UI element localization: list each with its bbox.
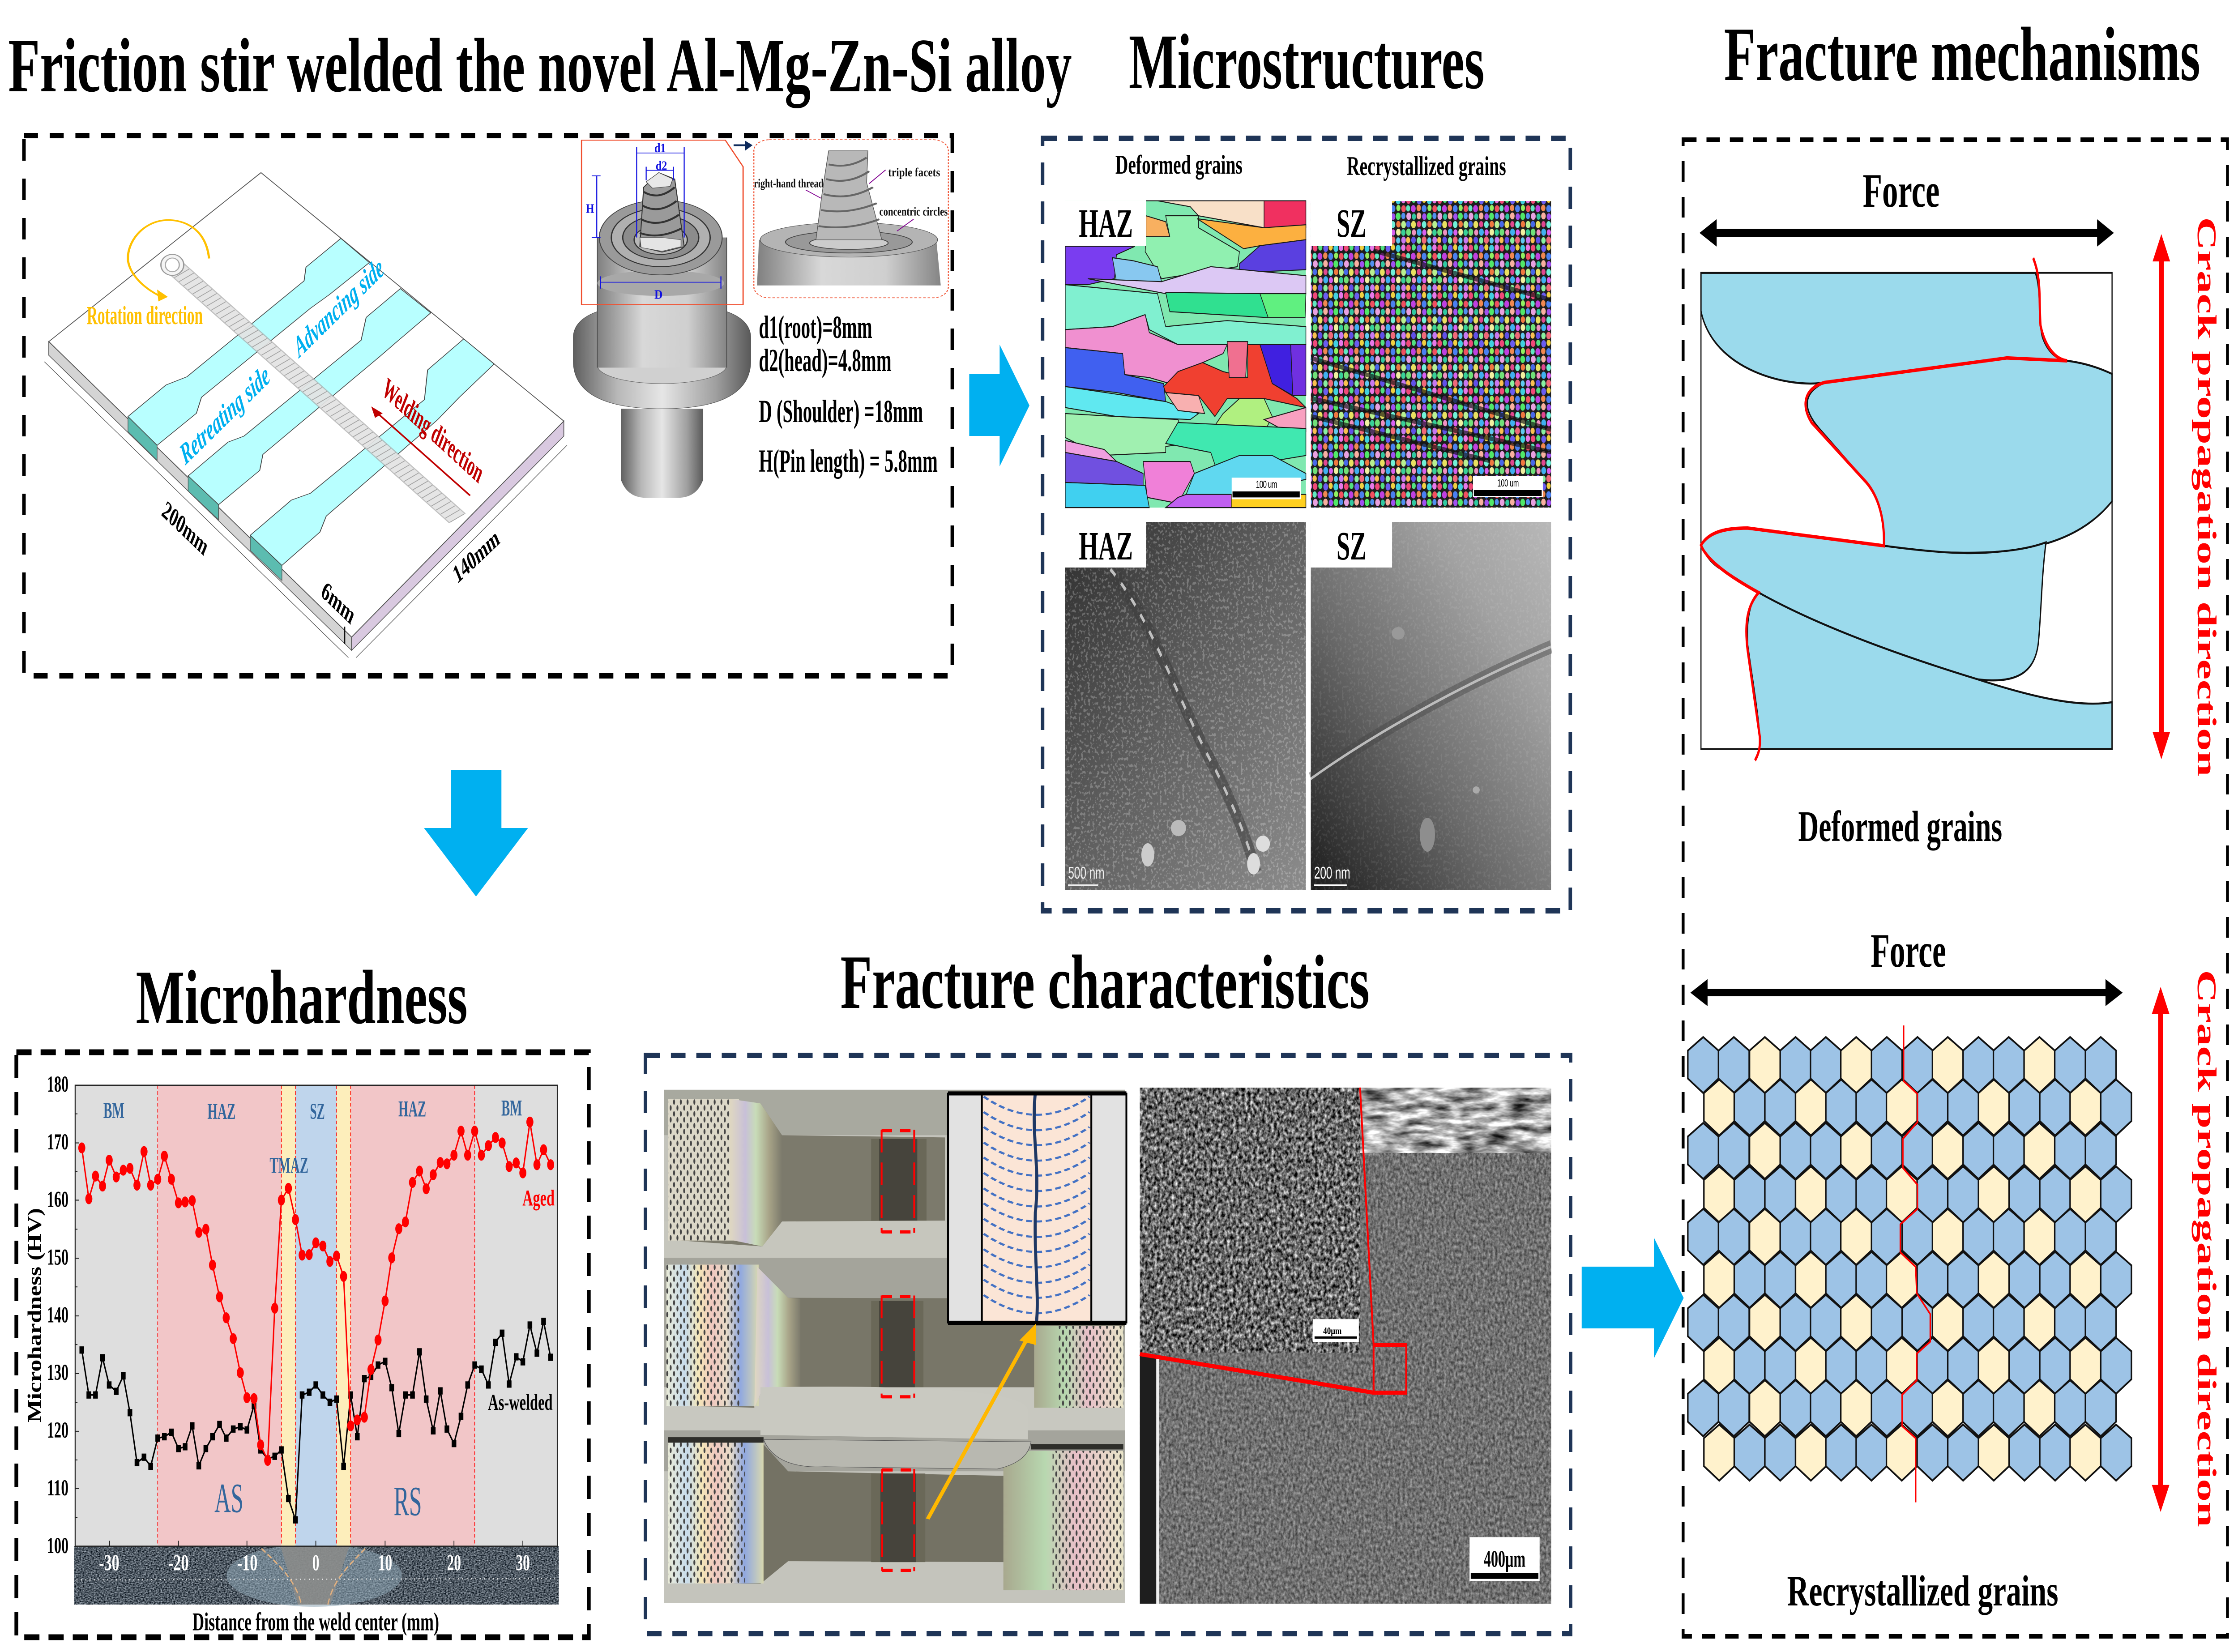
- y axis numbers: 140: [47, 1302, 68, 1328]
- y axis numbers: [47, 1072, 68, 1558]
- arrow: weld zone to inset: [928, 1323, 1036, 1519]
- label: 200mm: 200mm: [159, 495, 212, 561]
- tool dimensions text: d1(root)=8mm: [759, 310, 872, 346]
- tool inset labels: triple facets: [888, 166, 940, 179]
- tool dimensions text: d2(head)=4.8mm: [759, 343, 892, 379]
- dimension letters on tool: H: [586, 202, 594, 216]
- zone labels: HAZ: [207, 1099, 235, 1124]
- panel: friction stir welding setup: [24, 136, 952, 676]
- label: crack propagation direction, recrystallized: Crack propagation direction: [2192, 970, 2221, 1527]
- column heading: recrystallized grains: Recrystallized grains: [1347, 151, 1506, 181]
- specimen 1: [668, 1099, 945, 1246]
- y axis numbers: 160: [47, 1187, 68, 1212]
- scale label: 100 um: [1256, 479, 1277, 491]
- label: force: Force: [1871, 924, 1946, 978]
- force arrow: recrystallized: [1691, 979, 2123, 1006]
- label: advancing side: Advancing side: [289, 251, 388, 365]
- label: deformed grains: Deformed grains: [1798, 802, 2002, 850]
- TEM image: HAZ: [1065, 522, 1306, 890]
- title: friction stir welded alloy: Friction stir welded the novel Al-Mg-Zn-Si alloy: [8, 23, 1072, 108]
- grain boundary inset: [948, 1092, 1126, 1323]
- y axis numbers: 150: [47, 1245, 68, 1270]
- stir tool drawing: [573, 140, 948, 498]
- red dashed boxes: [882, 1130, 914, 1571]
- SEM fractograph: [1140, 1088, 1551, 1604]
- label: force: Force: [1863, 164, 1939, 218]
- tool inset labels: [754, 166, 948, 218]
- weld cross-section strip: [74, 1544, 559, 1607]
- label: crack propagation direction, deformed: Crack propagation direction: [2192, 217, 2221, 777]
- tool inset labels: concentric circles: [879, 205, 948, 218]
- x axis title: Distance from the weld center (mm): [192, 1608, 439, 1636]
- arrow: setup to microstructures: [969, 345, 1029, 466]
- y axis title: Microhardness (HV): [24, 1208, 45, 1422]
- y axis numbers: 110: [47, 1476, 68, 1501]
- heading: fracture characteristics: Fracture characteristics: [841, 940, 1370, 1025]
- zone labels: SZ: [310, 1099, 325, 1124]
- zone labels: BM: [501, 1096, 522, 1121]
- x axis numbers: 10: [378, 1550, 392, 1575]
- aged series: [82, 1122, 551, 1460]
- series label: as-welded: As-welded: [488, 1390, 553, 1415]
- y axis numbers: 170: [47, 1130, 68, 1155]
- label: 140mm: 140mm: [449, 523, 503, 589]
- scale label: 100 um: [1497, 478, 1519, 489]
- specimen 3: [668, 1442, 1123, 1590]
- photo: tensile specimens: [664, 1090, 1126, 1603]
- y axis numbers: 130: [47, 1360, 68, 1385]
- label: retreating side: Retreating side: [175, 359, 273, 471]
- tool dimensions text: D (Shoulder) =18mm: [759, 394, 923, 430]
- crack direction arrow: deformed: [2153, 234, 2170, 759]
- arrow: setup to microhardness: [424, 770, 528, 896]
- label: welding direction: Welding direction: [379, 371, 487, 490]
- y axis numbers: 120: [47, 1418, 68, 1443]
- x axis numbers: [99, 1550, 530, 1575]
- dimension letters on tool: d1: [654, 141, 666, 155]
- SZ label on EBSD map: SZ: [1337, 201, 1367, 246]
- dimension letters on tool: D: [654, 288, 662, 302]
- x axis numbers: -10: [237, 1550, 257, 1575]
- HAZ label on TEM image: HAZ: [1079, 524, 1133, 568]
- heading: fracture mechanisms: Fracture mechanisms: [1724, 12, 2200, 97]
- tool dimensions text: [759, 310, 938, 479]
- scale label: 500 nm: [1068, 863, 1105, 882]
- x axis numbers: 0: [312, 1550, 319, 1575]
- crack direction arrow: recrystallized: [2152, 987, 2170, 1512]
- panel: fracture characteristics: [645, 1055, 1571, 1634]
- tool dimensions text: H(Pin length) = 5.8mm: [759, 444, 938, 479]
- scale label: 200 nm: [1314, 863, 1350, 882]
- TEM image: SZ: [1311, 522, 1551, 890]
- zone labels: BM: [103, 1098, 124, 1123]
- zone labels: TMAZ: [269, 1153, 308, 1178]
- column heading: deformed grains: Deformed grains: [1115, 150, 1243, 179]
- EBSD map: SZ recrystallized grains: [1311, 201, 1551, 508]
- zone labels: HAZ: [398, 1097, 426, 1122]
- panel: microhardness: [17, 1052, 589, 1637]
- dimension letters on tool: d2: [656, 159, 667, 173]
- heading: microhardness: Microhardness: [136, 955, 468, 1040]
- hardness line chart: [47, 1072, 557, 1636]
- label: 6mm: 6mm: [318, 576, 359, 630]
- schematic: deformed grains: [1701, 258, 2112, 760]
- x axis numbers: -20: [168, 1550, 188, 1575]
- panel: microstructures: [1042, 138, 1570, 911]
- series label: aged: Aged: [522, 1186, 555, 1211]
- x axis numbers: 20: [447, 1550, 461, 1575]
- welded plate schematic: [44, 173, 567, 657]
- SEM fractograph: 400μm: [1484, 1545, 1525, 1572]
- x axis numbers: 30: [516, 1550, 530, 1575]
- dimension letters on tool: [586, 141, 667, 302]
- x axis numbers: -30: [99, 1550, 120, 1575]
- specimen 2: [666, 1265, 1125, 1408]
- EBSD map: HAZ deformed grains: [1065, 201, 1306, 508]
- as-welded series: [82, 1321, 551, 1520]
- SZ label on TEM image: SZ: [1337, 524, 1367, 568]
- arrow: fracture characteristics to mechanisms: [1582, 1238, 1684, 1358]
- schematic: recrystallized grains: [1688, 1025, 2131, 1503]
- y axis numbers: 180: [47, 1072, 68, 1097]
- zone labels: [103, 1096, 522, 1524]
- label: recrystallized grains: Recrystallized grains: [1787, 1566, 2059, 1615]
- y axis numbers: 100: [47, 1533, 68, 1558]
- tool inset labels: right-hand thread: [754, 176, 824, 190]
- zone labels: AS: [214, 1475, 243, 1521]
- label: rotation direction: Rotation direction: [87, 301, 203, 330]
- SEM magnified inset: [1140, 1088, 1360, 1353]
- zone labels: RS: [394, 1478, 422, 1524]
- panel: fracture mechanisms: [1683, 140, 2227, 1636]
- heading: microstructures: Microstructures: [1129, 19, 1484, 106]
- force arrow: deformed: [1700, 219, 2114, 247]
- scale label: 40 um: 40μm: [1323, 1325, 1341, 1336]
- HAZ label on EBSD map: HAZ: [1079, 201, 1133, 246]
